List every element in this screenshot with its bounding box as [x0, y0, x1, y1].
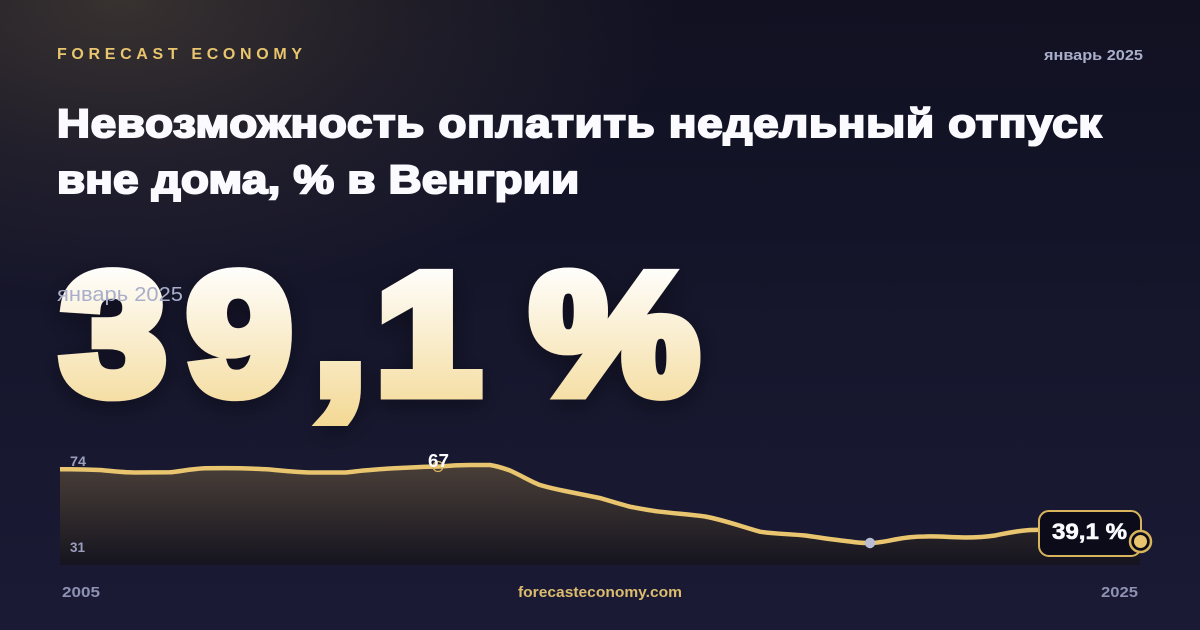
area chart	[60, 451, 1151, 565]
minimum point	[865, 538, 875, 548]
axis max label: 74	[70, 453, 86, 469]
x axis end year: 2025	[1101, 584, 1138, 601]
date subtitle: январь 2025	[57, 284, 183, 306]
date top right: январь 2025	[1044, 47, 1143, 64]
chart line	[60, 465, 1060, 543]
source: forecasteconomy.com	[518, 584, 682, 601]
chart area fill	[60, 465, 1140, 565]
big value: 39,1 %	[61, 239, 698, 430]
peak marker: 67	[428, 451, 449, 471]
axis min label: 31	[70, 539, 85, 555]
title: Невозможность оплатить недельный отпуск	[57, 102, 1102, 146]
end marker	[1130, 531, 1151, 552]
brand label: FORECAST ECONOMY	[57, 46, 302, 63]
current value callout	[1039, 511, 1141, 556]
title: вне дома, % в Венгрии	[57, 158, 579, 202]
x axis start year: 2005	[62, 584, 100, 601]
current value callout: 39,1 %	[1052, 519, 1127, 544]
title	[57, 102, 1102, 202]
